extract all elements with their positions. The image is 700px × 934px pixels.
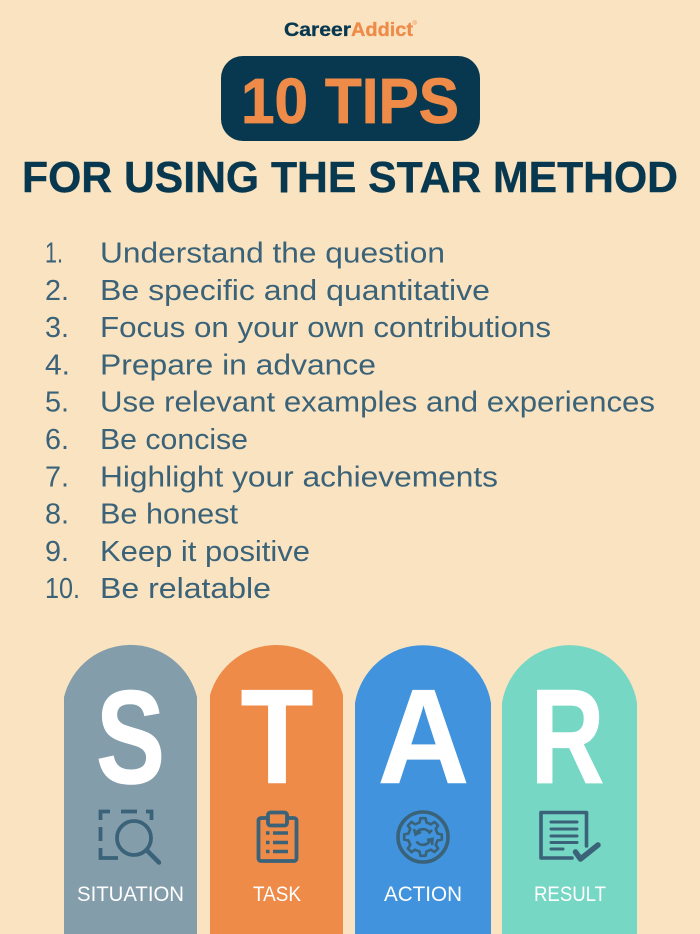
icon: clipboard [258, 812, 296, 861]
logo: CareerAddict: ® [412, 20, 418, 27]
tips list: Use relevant examples and experiences [100, 387, 655, 419]
tips list: Be relatable [100, 573, 271, 605]
tips list: 1. [45, 238, 63, 270]
panel: result [502, 645, 637, 934]
tips list [45, 238, 655, 605]
logo: CareerAddict: Addict [351, 19, 414, 41]
tips list: 5. [45, 387, 69, 419]
panel: task [210, 645, 343, 934]
panel: action [355, 645, 491, 934]
tips list: Keep it positive [100, 536, 310, 568]
icon: magnifier in focus frame [100, 812, 159, 862]
tips list: Prepare in advance [100, 349, 376, 381]
tips list: 6. [45, 424, 69, 456]
tips list: Be specific and quantitative [100, 275, 490, 307]
title badge: 10 TIPS: 10 TIPS [241, 65, 459, 137]
icon: document with check mark [541, 812, 598, 859]
tips list: 7. [45, 461, 69, 493]
tips list: Understand the question [100, 238, 445, 270]
tips list: 10. [45, 573, 80, 605]
panel: task: TASK [253, 882, 302, 906]
tips list: 9. [45, 536, 69, 568]
logo: CareerAddict: Career [284, 19, 351, 41]
panel: situation: S [96, 664, 165, 812]
logo: CareerAddict [284, 19, 418, 41]
tips list: 3. [45, 312, 69, 344]
panel: task: T [240, 661, 314, 812]
tips list: Be concise [100, 424, 248, 456]
panel: action: ACTION [384, 882, 462, 906]
tips list: 8. [45, 499, 69, 531]
panel: situation: SITUATION [77, 882, 184, 906]
tips list: Be honest [100, 499, 238, 531]
panel: action: A [378, 661, 470, 812]
tips list: Focus on your own contributions [100, 312, 551, 344]
heading: for using the STAR method: FOR USING THE STAR METHOD [22, 153, 678, 202]
tips list: 2. [45, 275, 69, 307]
tips list: Highlight your achievements [100, 461, 498, 493]
panel: result: RESULT [534, 882, 606, 906]
panel: situation [64, 645, 197, 934]
tips list: 4. [45, 349, 70, 381]
panel: result: R [530, 661, 604, 812]
icon: gear with arrows [398, 812, 448, 862]
